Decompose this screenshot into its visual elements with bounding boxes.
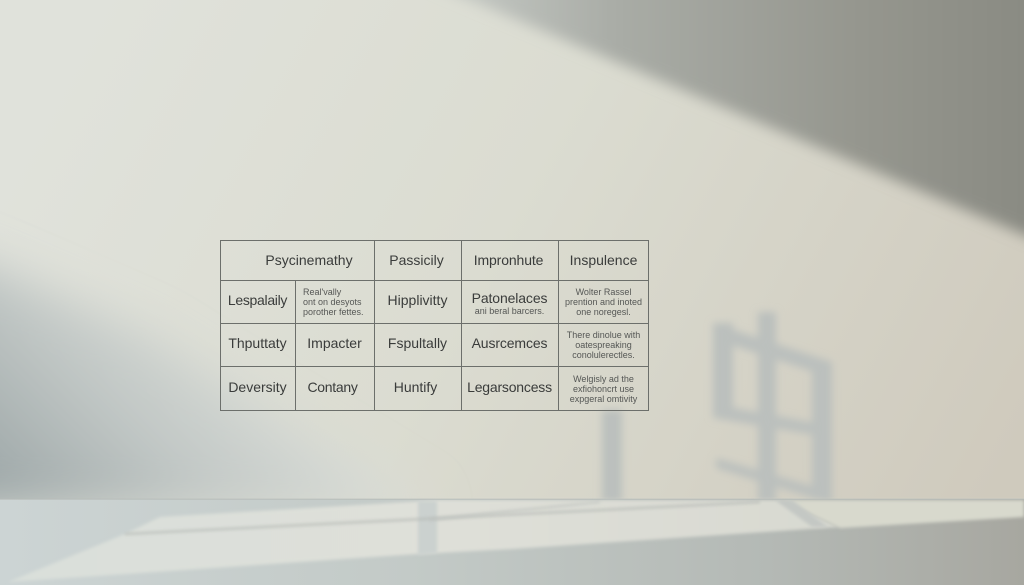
header cell: Impronhute: Impronhute bbox=[474, 252, 543, 268]
table bbox=[220, 240, 649, 411]
row 1 label: Lespalaily bbox=[228, 292, 287, 308]
row 3 note: exfiohoncrt use bbox=[573, 384, 634, 394]
row 1 note: one noregesl. bbox=[576, 306, 631, 316]
row 2 note: conolulerectles. bbox=[572, 350, 635, 360]
row 3 note: Welgisly ad the bbox=[573, 374, 634, 384]
row 1 note: Wolter Rassel bbox=[576, 286, 631, 296]
row 2 cell: Ausrcemces: Ausrcemces bbox=[472, 334, 547, 350]
row 1 cell: Patonelaces: ani beral barcers. bbox=[475, 306, 544, 316]
row 1 cell: Patonelaces: Patonelaces bbox=[472, 290, 547, 306]
row 3 cell: Contany: Contany bbox=[307, 378, 358, 394]
row 2 note: oatespreaking bbox=[575, 340, 632, 350]
row 3 cell: Huntify: Huntify bbox=[394, 378, 437, 394]
row 3 note bbox=[570, 374, 638, 404]
header row: Psycinemathy: Psycinemathy bbox=[265, 252, 353, 268]
header cell: Inspulence: Inspulence bbox=[570, 252, 637, 268]
row 1 small text: ont on desyots bbox=[303, 296, 362, 306]
row 2 label: Thputtaty bbox=[228, 334, 287, 350]
lit floor patch bbox=[8, 500, 838, 582]
row 1 note: prention and inoted bbox=[565, 296, 642, 306]
row 1 small text: porother fettes. bbox=[303, 306, 364, 316]
row 2 note bbox=[566, 330, 640, 360]
row 3 note: expgeral omtivity bbox=[570, 394, 637, 404]
row 1 cell: Hipplivitty: Hipplivitty bbox=[388, 292, 447, 308]
row 2 cell: Fspultally: Fspultally bbox=[388, 334, 447, 350]
row 2 note: There dinolue with bbox=[567, 330, 640, 340]
header cell: Passicily: Passicily bbox=[389, 252, 444, 268]
row 1 cell: Patonelaces bbox=[472, 290, 547, 316]
row 2 cell: Impacter: Impacter bbox=[307, 334, 362, 350]
row 3 cell: Legarsoncess: Legarsoncess bbox=[467, 378, 552, 394]
row 3 label: Deversity bbox=[228, 378, 287, 394]
row 1 small text bbox=[303, 286, 364, 317]
row 1 note bbox=[565, 286, 642, 317]
row 1 small text: Real'vally bbox=[303, 286, 341, 296]
